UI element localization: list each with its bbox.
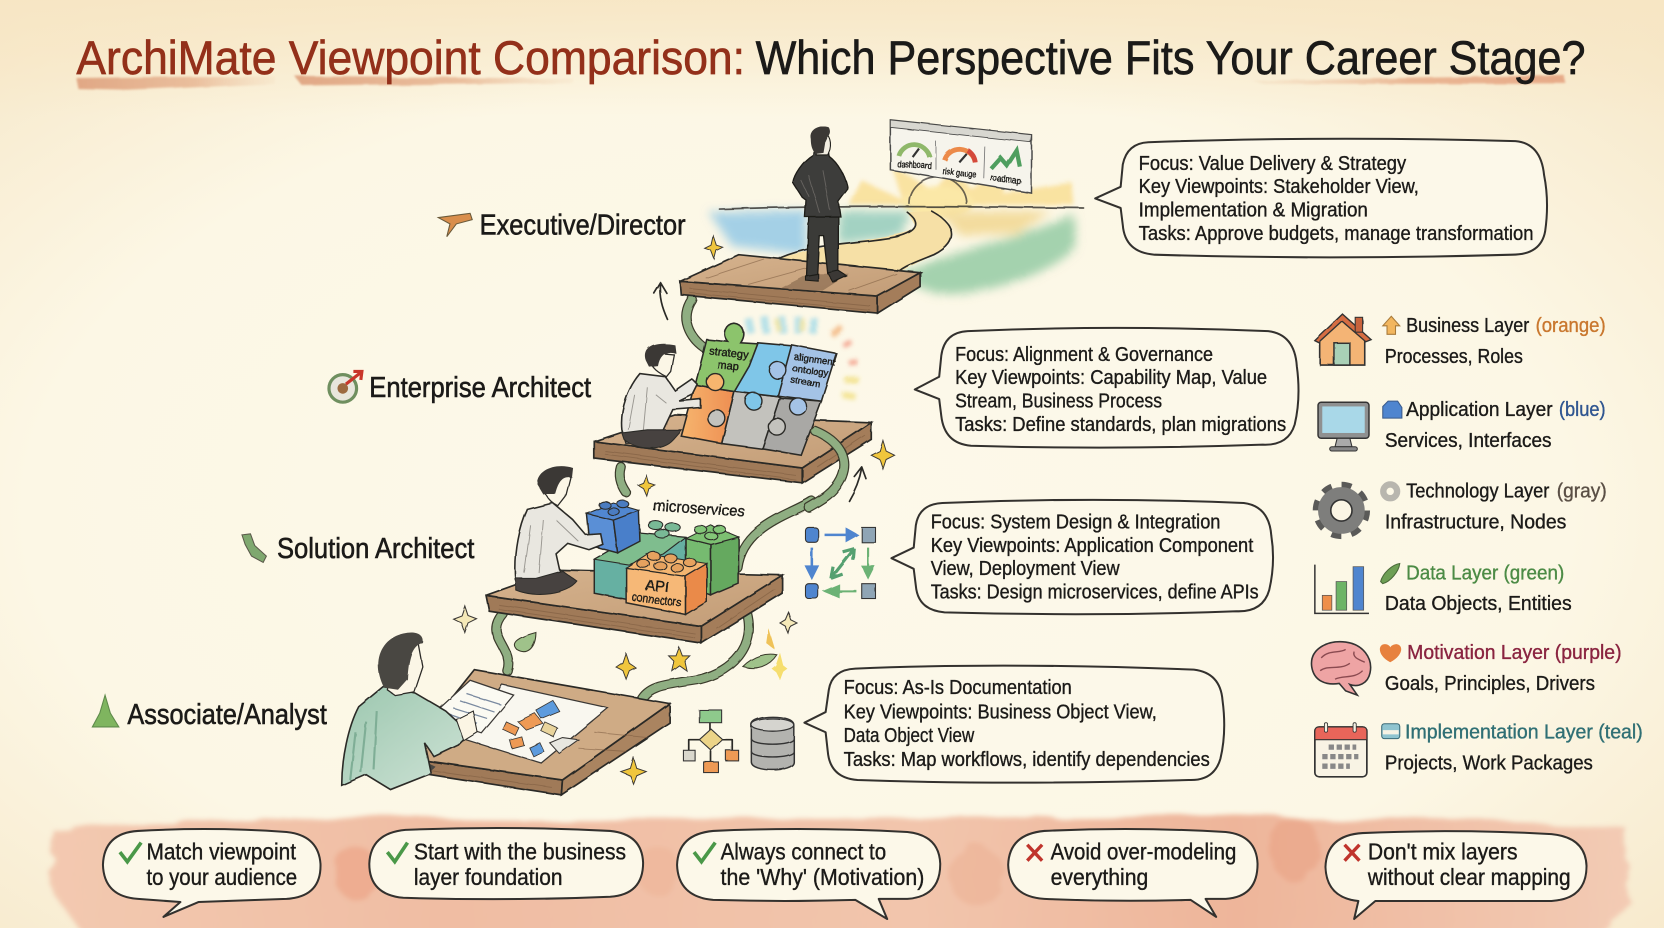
legend row: technology layer xyxy=(1317,480,1607,535)
title brush underline xyxy=(76,75,1566,90)
data layer name: Data Layer (green) xyxy=(1406,561,1564,584)
platform: executive xyxy=(680,255,920,313)
gauge: risk gauge: risk gauge xyxy=(942,166,977,180)
puzzle tabs xyxy=(707,374,807,427)
component arrows icon xyxy=(805,527,876,599)
title xyxy=(76,32,1585,90)
gauge: dashboard: dashboard xyxy=(897,159,932,171)
technology layer description: Infrastructure, Nodes xyxy=(1385,510,1566,533)
legend row: motivation layer xyxy=(1311,641,1622,695)
staircase illustration xyxy=(342,120,1084,795)
icon: monitor xyxy=(1318,402,1369,451)
vine: front of enterprise platform xyxy=(809,431,844,507)
icon: arrow pointer xyxy=(438,213,472,237)
legend row: application layer xyxy=(1318,398,1606,452)
executive callout text: Key Viewpoints: Stakeholder View, xyxy=(1139,175,1419,198)
associate callout text xyxy=(844,676,1210,771)
enterprise callout text: Key Viewpoints: Capability Map, Value xyxy=(955,366,1267,389)
lego blocks xyxy=(587,500,739,614)
label: enterprise architect xyxy=(329,371,591,404)
arrow: solution to enterprise xyxy=(849,467,866,501)
cross mark xyxy=(1345,845,1359,861)
platform: enterprise xyxy=(594,415,871,483)
puzzle piece: sky blue xyxy=(734,343,794,397)
sheet with flow diagram xyxy=(466,684,608,763)
solution callout text: Key Viewpoints: Application Component xyxy=(931,534,1254,557)
check mark xyxy=(387,843,408,862)
icon: brain xyxy=(1311,642,1371,695)
tip text line two: the 'Why' (Motivation) xyxy=(721,864,924,890)
solution label text: Solution Architect xyxy=(277,533,474,565)
database icon xyxy=(751,717,794,770)
title question text: Which Perspective Fits Your Career Stage? xyxy=(756,32,1585,85)
figure: enterprise architect xyxy=(622,344,700,448)
executive landscape vista xyxy=(709,164,1084,294)
puzzle label: alignment: stream xyxy=(790,375,821,390)
callout: executive xyxy=(1095,139,1547,257)
platform: associate desk xyxy=(403,670,670,795)
icon: small leaf xyxy=(1381,564,1400,584)
executive callout text: Tasks: Approve budgets, manage transformation xyxy=(1139,222,1533,245)
dashboard window xyxy=(890,120,1032,193)
tip text: Match viewpoint xyxy=(146,839,297,865)
landscape washes xyxy=(709,210,1076,294)
icon: small folder xyxy=(1383,401,1402,418)
puzzle board xyxy=(681,324,836,455)
icon: calendar xyxy=(1315,723,1367,777)
tip: connect to why xyxy=(677,829,940,919)
tip text line two: without clear mapping xyxy=(1367,864,1571,890)
tip text: Avoid over-modeling xyxy=(1051,839,1236,865)
associate callout text: Tasks: Map workflows, identify dependencies xyxy=(844,748,1210,771)
tip text: Always connect to xyxy=(721,839,886,865)
watercolour band xyxy=(51,815,1630,928)
associate callout text: Key Viewpoints: Business Object View, xyxy=(844,700,1157,723)
tip text: Don't mix layers xyxy=(1368,839,1518,865)
associate callout text: Focus: As-Is Documentation xyxy=(844,676,1072,699)
application layer colour tag: (blue) xyxy=(1559,398,1606,421)
block: blue xyxy=(587,500,640,553)
label: microservices: microservices xyxy=(652,497,746,521)
arrow: analyst to upper levels xyxy=(654,282,668,319)
puzzle label: alignment: ontology xyxy=(792,363,829,379)
tip text line two: layer foundation xyxy=(414,864,562,890)
motivation layer description: Goals, Principles, Drivers xyxy=(1385,672,1595,695)
icon: small heart xyxy=(1380,644,1401,662)
implementation layer name: Implementation Layer (teal) xyxy=(1405,721,1643,744)
puzzle piece: gray dark xyxy=(763,397,821,455)
tip text: Start with the business xyxy=(414,839,626,865)
icon: target xyxy=(329,371,362,402)
cross mark xyxy=(1027,845,1042,861)
callout: enterprise xyxy=(915,328,1299,448)
puzzle label: strategy map: map xyxy=(717,359,740,373)
executive label text: Executive/Director xyxy=(480,210,686,242)
enterprise callout text: Tasks: Define standards, plan migrations xyxy=(955,413,1286,436)
icon: small browser xyxy=(1382,724,1400,739)
puzzle label: strategy map: strategy xyxy=(709,345,749,362)
figure: executive xyxy=(793,126,848,282)
icon: house xyxy=(1315,314,1371,365)
tip text line two: to your audience xyxy=(146,864,297,890)
flow diagram icon xyxy=(683,710,739,773)
puzzle label: alignment: alignment xyxy=(793,352,836,368)
label: executive/director xyxy=(438,210,686,242)
block: teal xyxy=(594,521,686,600)
legend row: business layer xyxy=(1315,314,1606,368)
chart: roadmap xyxy=(990,151,1022,186)
puzzle piece: green xyxy=(695,324,758,392)
check mark xyxy=(120,843,141,862)
enterprise callout text xyxy=(955,343,1286,436)
puzzle piece: slate blue xyxy=(778,345,836,401)
enterprise label text: Enterprise Architect xyxy=(369,372,591,404)
figure: associate analyst xyxy=(342,632,478,790)
legend row: implementation layer xyxy=(1315,721,1643,777)
check mark xyxy=(694,843,715,862)
enterprise callout text: Stream, Business Process xyxy=(955,390,1162,413)
icon: wrench xyxy=(242,534,266,562)
solution callout text: View, Deployment View xyxy=(931,557,1120,580)
block label: connectors: connectors xyxy=(631,590,682,610)
platform: solution xyxy=(486,570,782,643)
callout: solution xyxy=(891,500,1273,614)
mini flow boxes xyxy=(503,700,559,756)
block: green xyxy=(686,525,739,595)
puzzle piece: gray light xyxy=(722,392,780,449)
tips band xyxy=(51,815,1630,928)
associate label text: Associate/Analyst xyxy=(127,699,327,731)
tip: match viewpoint xyxy=(103,829,321,917)
icon: gear xyxy=(1317,486,1366,535)
technology layer colour tag: (gray) xyxy=(1557,480,1607,503)
label: associate/analyst xyxy=(92,695,327,731)
title accent text: ArchiMate Viewpoint Comparison: xyxy=(76,32,745,85)
technology layer name: Technology Layer xyxy=(1406,480,1549,503)
vines between platforms xyxy=(496,299,812,700)
tip: business layer foundation xyxy=(369,828,643,899)
icon: green cone xyxy=(92,695,119,727)
rainbow glow above puzzle xyxy=(748,316,859,397)
gauge: risk gauge xyxy=(942,149,977,180)
puzzle piece: orange xyxy=(681,385,734,444)
solution callout text: Tasks: Design microservices, define APIs xyxy=(931,581,1259,604)
executive callout text xyxy=(1139,152,1533,245)
solution callout text: Focus: System Design & Integration xyxy=(931,510,1220,533)
business layer name: Business Layer xyxy=(1406,314,1529,337)
application layer name: Application Layer xyxy=(1406,398,1553,421)
business layer colour tag: (orange) xyxy=(1536,314,1606,337)
data layer description: Data Objects, Entities xyxy=(1385,592,1572,615)
legend: architecture layers xyxy=(1311,314,1643,777)
implementation layer description: Projects, Work Packages xyxy=(1385,751,1593,774)
motivation layer name: Motivation Layer (purple) xyxy=(1407,641,1622,664)
application layer description: Services, Interfaces xyxy=(1385,429,1552,452)
icon: bar chart xyxy=(1315,565,1369,613)
label: solution architect xyxy=(242,533,474,565)
associate callout text: Data Object View xyxy=(844,724,974,747)
block label: API: API xyxy=(645,578,670,597)
sunset rays xyxy=(849,164,1074,219)
tip text line two: everything xyxy=(1051,864,1148,890)
executive callout text: Implementation & Migration xyxy=(1139,198,1368,221)
block: orange API connectors xyxy=(626,552,707,614)
figure: solution architect xyxy=(515,466,603,594)
winding road xyxy=(743,211,952,278)
callout: associate xyxy=(804,666,1224,783)
solution callout text xyxy=(931,510,1259,604)
document held by analyst xyxy=(431,680,514,733)
icon: small gear xyxy=(1383,484,1397,498)
legend row: data layer xyxy=(1315,561,1572,615)
sparkle stars xyxy=(453,236,895,784)
chart: roadmap: roadmap xyxy=(990,172,1022,186)
tip: avoid over-modeling xyxy=(1008,829,1258,917)
gauge: dashboard xyxy=(897,145,932,171)
icon: small up arrow xyxy=(1383,316,1400,334)
executive callout text: Focus: Value Delivery & Strategy xyxy=(1139,152,1407,175)
enterprise callout text: Focus: Alignment & Governance xyxy=(955,343,1213,366)
tip: do not mix layers xyxy=(1325,831,1587,919)
business layer description: Processes, Roles xyxy=(1385,345,1523,368)
